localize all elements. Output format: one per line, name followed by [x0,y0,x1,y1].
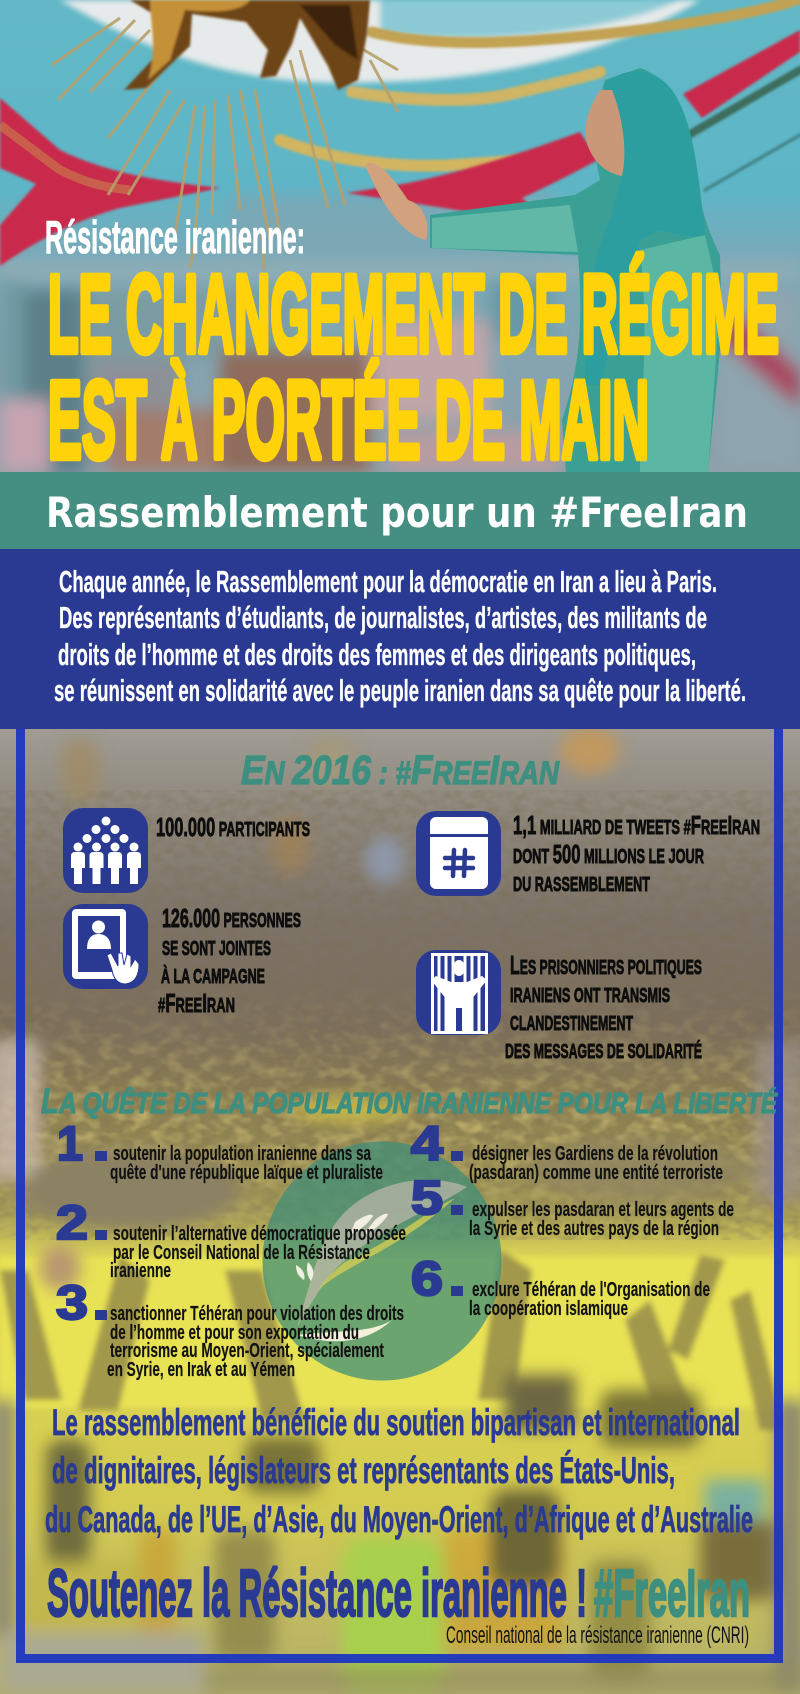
circular NCRI emblem [262,1142,502,1380]
item 6: 6 [411,1253,443,1306]
icon: prisoner behind bars [416,950,501,1035]
item 1: 1 [57,1118,83,1171]
item 5 [411,1172,734,1240]
item 2: iranienne [110,1260,171,1282]
item 2: 2 [56,1197,88,1250]
stat: prisonniers politiques [416,950,702,1063]
stat: tweets: DU RASSEMBLEMENT [513,874,650,896]
panel: introduction [0,549,800,729]
woman [365,68,722,472]
lion emblem [124,0,370,90]
item 1: soutenir la population iranienne dans sa [113,1143,372,1165]
icon: tablet with hand [63,904,148,989]
yellow banner with blurred letters [0,1250,800,1430]
stat: prisonniers politiques: IRANIENS ONT TRANSMIS [510,985,670,1007]
item 3: en Syrie, en Irak et au Yémen [107,1359,295,1381]
item 2: par le Conseil National de la Résistance [113,1242,370,1264]
stat: 126.000 personnes: #FREEIRAN [158,988,235,1018]
item 2: soutenir l’alternative démocratique proposée [113,1223,406,1245]
stat: 126.000 personnes: 126.000 PERSONNES [162,903,301,933]
band: Rassemblement pour un #FreeIran [0,472,800,549]
blue frame [20,729,778,1658]
stat: 100.000 participants: 100.000 PARTICIPANTS [156,812,310,842]
icon: hashtag [416,811,501,896]
heading: En 2016: EN 2016 : #FREEIRAN [241,747,560,793]
item 2 [56,1197,406,1282]
item 1: quête d'une république laïque et pluraliste [110,1162,383,1184]
stat: 126.000 personnes [63,903,301,1018]
header photo: rally stage with Maryam Radjavi [0,0,800,475]
icon: crowd [63,808,148,893]
stage reflection (lower part) [0,195,800,475]
item 6: la coopération islamique [469,1298,628,1320]
item 4 [411,1118,723,1184]
subtitle: Résistance iranienne: Résistance iranienne: [45,211,305,263]
stat: tweets [416,810,760,896]
item 3: sanctionner Téhéran pour violation des droits [110,1303,404,1325]
item 5: 5 [411,1172,443,1225]
item 3: 3 [56,1277,88,1330]
support paragraph [45,1402,753,1540]
item 3: terrorisme au Moyen-Orient, spécialement [110,1340,384,1362]
white swooshes [60,0,700,83]
stat: 100.000 participants [63,808,310,893]
stat: 126.000 personnes: À LA CAMPAGNE [161,965,265,988]
stat: tweets: DONT 500 MILLIONS LE JOUR [513,839,704,869]
stat: prisonniers politiques: CLANDESTINEMENT [510,1013,633,1035]
stat: tweets: 1,1 MILLIARD DE TWEETS #FREEIRAN [513,810,760,840]
item 3 [56,1277,404,1381]
item 1 [57,1118,383,1184]
item 6 [411,1253,710,1320]
stat: 126.000 personnes: SE SONT JOINTES [162,938,271,960]
main title [48,253,779,482]
red chevrons [0,30,800,266]
crowd photo background [0,726,800,1694]
item 3: de l’homme et pour son exportation du [110,1322,359,1344]
sun rays [52,18,398,270]
item 4: 4 [411,1118,443,1171]
gold ribbons [280,0,800,190]
